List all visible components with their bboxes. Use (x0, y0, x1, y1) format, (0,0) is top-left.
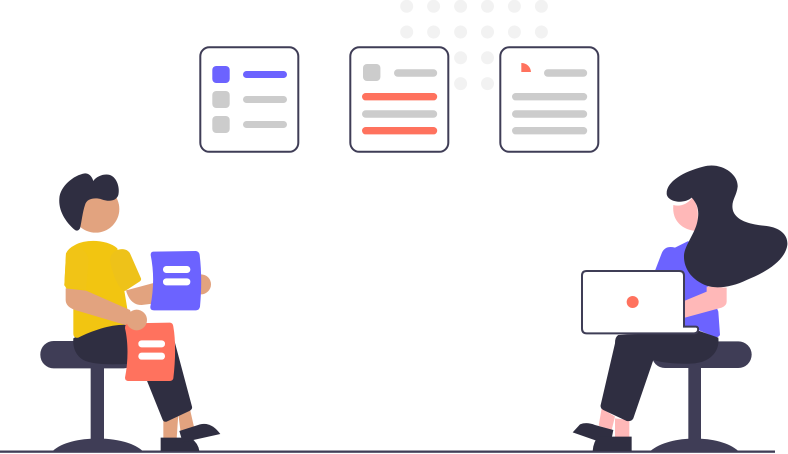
head and hair (59, 173, 119, 233)
background dot grid (400, 0, 548, 90)
legs and shoes (73, 323, 220, 451)
blue document (150, 251, 201, 310)
stool (40, 341, 143, 451)
hair (667, 165, 787, 287)
ground line (0, 450, 775, 453)
arms (66, 274, 211, 328)
hand (126, 310, 147, 330)
stool (650, 341, 752, 451)
card: chart and text lines (500, 47, 598, 152)
card: list with icons (200, 47, 298, 152)
figure: woman on stool with laptop (573, 165, 787, 451)
arm (685, 287, 727, 318)
trousers (601, 331, 719, 421)
legs and shoes (573, 408, 632, 451)
card: highlighted text lines (350, 47, 448, 152)
purple top (653, 241, 720, 337)
red document (125, 323, 175, 381)
face (673, 198, 698, 231)
yellow shirt (64, 241, 141, 338)
figure: man on stool with documents (40, 173, 220, 451)
laptop (582, 271, 698, 333)
